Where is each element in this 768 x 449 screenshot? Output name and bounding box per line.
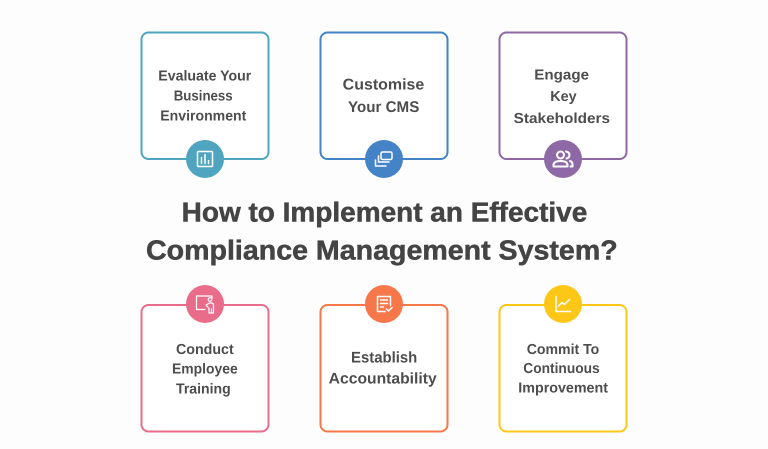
icon: bar chart: [186, 140, 224, 178]
card text: Evaluate Your Business Environment: Environment: [160, 108, 246, 124]
icon: line chart: [544, 285, 582, 323]
card text: Conduct Employee Training: Training: [176, 382, 231, 398]
card text: Evaluate Your Business Environment: Business: [174, 89, 233, 105]
card text: Customise Your CMS: Your CMS: [348, 99, 419, 116]
card text: Commit To Continuous Improvement: Continuous: [523, 361, 600, 377]
card text: Customise Your CMS: Customise: [343, 77, 425, 94]
card text: Commit To Continuous Improvement: Improvement: [518, 380, 608, 396]
card text: Engage Key Stakeholders: Key: [550, 89, 577, 105]
panel: Customise Your CMS: [320, 32, 448, 178]
panel: Conduct Employee Training: [142, 285, 268, 432]
panel: Establish Accountability: [320, 285, 448, 432]
card text: Establish Accountability: Accountability: [329, 371, 437, 388]
title: [146, 196, 618, 265]
title: Compliance Management System?: [146, 234, 618, 265]
card text: Commit To Continuous Improvement: [518, 342, 608, 396]
card text: Establish Accountability: [329, 349, 437, 388]
card text: Engage Key Stakeholders: Stakeholders: [514, 111, 610, 127]
panel: Engage Key Stakeholders: [500, 32, 626, 178]
title: How to Implement an Effective: [182, 196, 587, 227]
icon: stacked layers: [365, 140, 403, 178]
card text: Conduct Employee Training: Conduct: [176, 342, 234, 358]
card text: Engage Key Stakeholders: [514, 67, 610, 127]
card text: Evaluate Your Business Environment: Evaluate Your: [158, 69, 252, 85]
icon: trainer at board: [186, 285, 224, 323]
panel: Commit To Continuous Improvement: [500, 285, 626, 432]
card text: Establish Accountability: Establish: [351, 349, 417, 366]
icon: checklist document: [365, 285, 403, 323]
card text: Evaluate Your Business Environment: [158, 69, 252, 124]
card text: Customise Your CMS: [343, 77, 425, 116]
panel: Evaluate Your Business Environment: [142, 32, 268, 178]
card text: Conduct Employee Training: Employee: [172, 362, 238, 378]
card text: Conduct Employee Training: [172, 342, 238, 398]
card text: Engage Key Stakeholders: Engage: [534, 67, 589, 83]
card text: Commit To Continuous Improvement: Commit To: [527, 342, 599, 358]
icon: people: [544, 140, 582, 178]
